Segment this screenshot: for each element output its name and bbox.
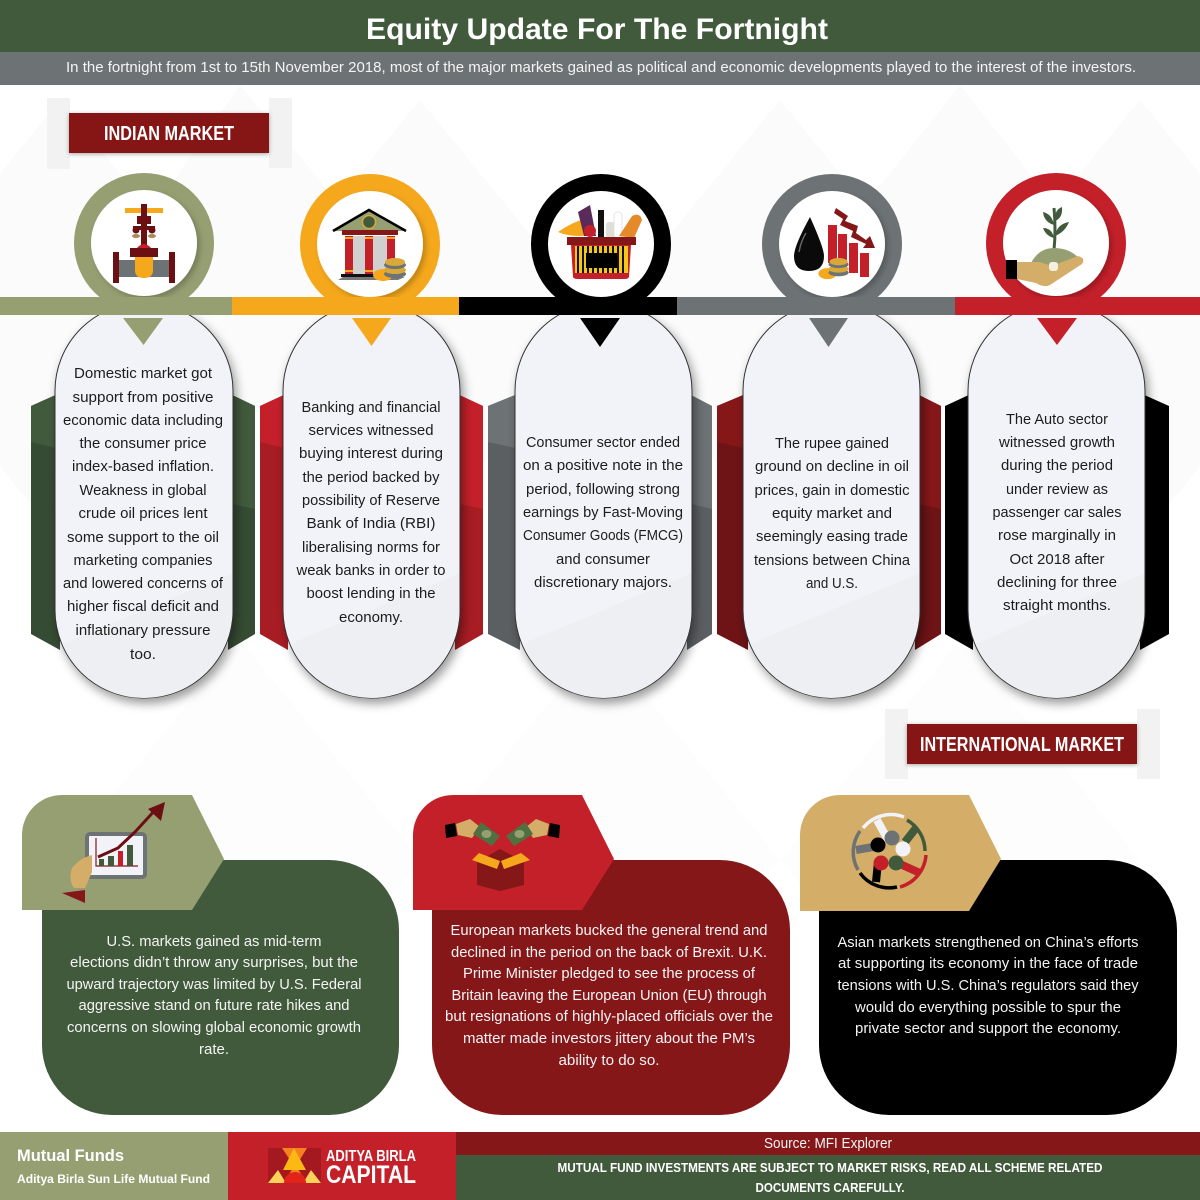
capsule text 1: Weakness in global	[80, 482, 206, 499]
icon: hand with plant	[1006, 207, 1083, 286]
title: Equity Update For The Fortnight	[366, 13, 828, 46]
capsule text 2: services witnessed	[308, 422, 434, 439]
Asia text: would do everything possible to spur the	[854, 999, 1121, 1016]
capsule text 4: equity market and	[772, 505, 892, 522]
capsule text 2: Banking and financial	[302, 399, 440, 416]
capsule text 5: under review as	[1006, 481, 1108, 498]
capsule text 1: some support to the oil	[67, 529, 219, 546]
US text: rate.	[199, 1041, 229, 1058]
capsule text 1: Domestic market got	[74, 365, 213, 382]
capsule 4	[743, 303, 920, 698]
capsule text 1: inflationary pressure	[76, 622, 210, 639]
icon: bank	[333, 210, 406, 281]
capsule text 3: on a positive note in the	[523, 457, 683, 474]
footer: disclaimer: MUTUAL FUND INVESTMENTS ARE SUBJECT TO MARKET RISKS, READ ALL SCHEME RELATED	[558, 1160, 1102, 1175]
capsule text 3: earnings by Fast-Moving	[523, 504, 683, 521]
Asia text: private sector and support the economy.	[855, 1020, 1121, 1037]
capsule text 3: Consumer sector ended	[526, 434, 680, 451]
card wings	[31, 393, 1169, 650]
capsule text 5: Oct 2018 after	[1010, 551, 1104, 568]
US text: upward trajectory was limited by U.S. Federal	[66, 976, 362, 993]
footer: logo: ADITYA BIRLA	[326, 1148, 416, 1165]
Europe tag	[413, 795, 614, 910]
US text: concerns on slowing global economic growth	[67, 1019, 361, 1036]
header: title band	[0, 0, 1200, 52]
US text: aggressive stand on future rate hikes and	[78, 997, 350, 1014]
capsule text 2: the period backed by	[302, 469, 440, 486]
capsule text 4: tensions between China	[754, 552, 911, 569]
Europe text	[445, 922, 773, 1069]
capsule 2	[283, 303, 460, 698]
capsule text 2	[296, 399, 446, 626]
capsule text 1: index-based inflation.	[72, 458, 214, 475]
capsule 1	[55, 303, 233, 698]
icon: money and box	[445, 819, 560, 891]
capsule text 2: buying interest during	[299, 445, 443, 462]
icon: wheel of hands	[853, 815, 926, 888]
capsule text 2: possibility of Reserve	[302, 492, 440, 509]
panel: European markets	[413, 795, 790, 1115]
capsule text 3	[523, 434, 683, 591]
icon: valve	[113, 204, 175, 283]
badge: International market: INTERNATIONAL MARKET	[920, 734, 1124, 756]
capsule text 4: prices, gain in domestic	[754, 482, 910, 499]
capsule text 3: discretionary majors.	[534, 574, 672, 591]
US tag	[22, 795, 224, 910]
capsule text 1: and lowered concerns of	[63, 575, 224, 592]
capsule text 5: during the period	[1001, 457, 1113, 474]
footer: disclaimer: DOCUMENTS CAREFULLY.	[756, 1180, 904, 1195]
Europe text: declined in the period on the back of Brexit. U.K.	[451, 944, 767, 961]
footer: logo: CAPITAL	[326, 1161, 416, 1189]
Europe text: Prime Minister pledged to see the process of	[463, 965, 756, 982]
panel: Asian markets	[800, 795, 1177, 1115]
capsule text 3: Consumer Goods (FMCG)	[523, 527, 683, 544]
capsule text 1: marketing companies	[74, 552, 212, 569]
capsule text 5: The Auto sector	[1006, 411, 1108, 428]
capsule text 3: and consumer	[556, 551, 650, 568]
capsule text 1: higher fiscal deficit and	[67, 598, 219, 615]
US text: elections didn’t throw any surprises, but the	[70, 954, 358, 971]
capsule text 5: rose marginally in	[998, 527, 1116, 544]
icon: grocery basket	[558, 205, 642, 279]
icon: tablet chart	[62, 802, 165, 903]
badge: Indian market: INDIAN MARKET	[104, 123, 234, 145]
capsule text 5	[992, 411, 1122, 614]
capsule text 4	[754, 435, 911, 592]
footer: fund name: Mutual Funds	[17, 1146, 124, 1165]
capsule text 3: period, following strong	[526, 481, 680, 498]
capsule text 2: Bank of India (RBI)	[306, 515, 436, 532]
capsule text 1: support from positive	[72, 389, 214, 406]
rings and timeline bar	[0, 173, 1200, 315]
capsule text 2: liberalising norms for	[302, 539, 440, 556]
Europe text: European markets bucked the general trend and	[450, 922, 768, 939]
US text: U.S. markets gained as mid-term	[106, 933, 322, 950]
capsule text 4: seemingly easing trade	[756, 528, 908, 545]
Europe text: ability to do so.	[558, 1052, 660, 1069]
US text	[66, 933, 362, 1058]
Europe text: but resignations of highly-placed officials over the	[445, 1008, 773, 1025]
capsule text 1: economic data including	[63, 412, 223, 429]
panel: US markets	[22, 795, 399, 1115]
Asia text: Asian markets strengthened on China’s efforts	[838, 934, 1138, 951]
Asia text	[838, 934, 1139, 1037]
footer: fund name	[0, 1132, 228, 1200]
pointers	[123, 318, 1077, 347]
capsule 3	[515, 303, 692, 698]
capsule text 1: the consumer price	[80, 435, 206, 452]
capsule text 2: weak banks in order to	[296, 562, 446, 579]
capsule text 4: ground on decline in oil	[755, 458, 909, 475]
capsule text 4: The rupee gained	[775, 435, 889, 452]
footer: disclaimer	[456, 1155, 1200, 1200]
Europe text: matter made investors jittery about the PM’s	[463, 1030, 755, 1047]
footer: fund name: Aditya Birla Sun Life Mutual Fund	[17, 1172, 210, 1186]
badge: Indian market	[47, 98, 292, 169]
footer: source	[456, 1132, 1200, 1155]
footer: logo	[228, 1132, 456, 1200]
capsule 5	[968, 303, 1145, 698]
capsule text 1	[63, 365, 224, 663]
intro text: In the fortnight from 1st to 15th November 2018, most of the major markets gained as political and economic developments played to the interest of the investors.	[66, 59, 1136, 76]
capsule text 2: economy.	[339, 609, 403, 626]
Asia text: tensions with U.S. China’s regulators said they	[838, 977, 1139, 994]
capsule text 2: boost lending in the	[306, 585, 436, 602]
icon: oil drop and falling chart	[794, 208, 875, 279]
intro band	[0, 52, 1200, 85]
capsule text 5: witnessed growth	[998, 434, 1115, 451]
Asia text: at supporting its economy in the face of trade	[838, 955, 1138, 972]
capsule text 5: passenger car sales	[992, 504, 1122, 521]
badge: International market	[885, 709, 1160, 779]
capsule text 1: crude oil prices lent	[78, 505, 208, 522]
capsule text 1: too.	[130, 646, 156, 663]
capsule text 4: and U.S.	[806, 575, 858, 592]
footer: source: Source: MFI Explorer	[764, 1135, 892, 1152]
Europe text: Britain leaving the European Union (EU) through	[452, 987, 766, 1004]
capsule text 5: declining for three	[997, 574, 1117, 591]
capsule text 5: straight months.	[1003, 597, 1111, 614]
Asia tag	[800, 795, 1001, 911]
